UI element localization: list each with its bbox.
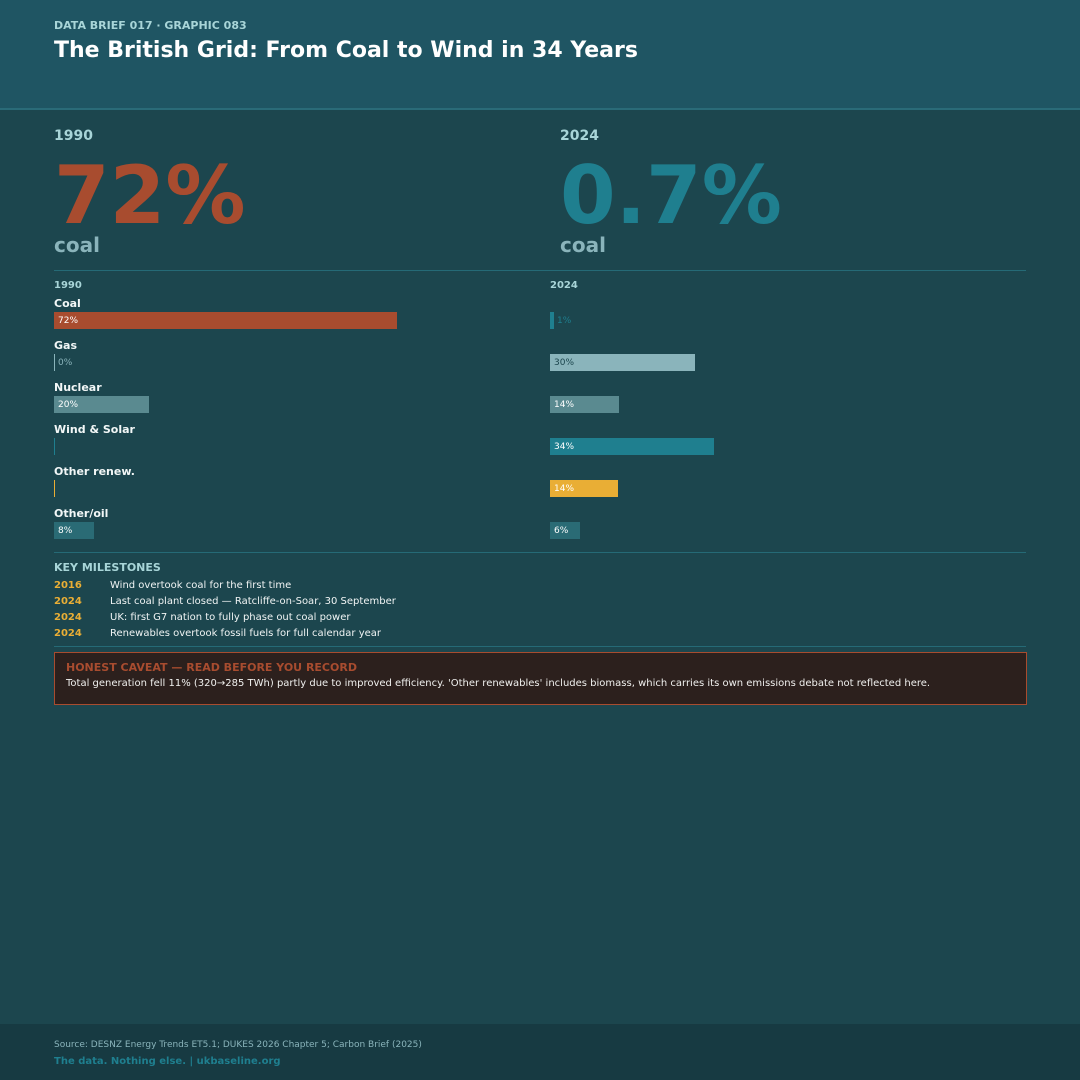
milestones heading: KEY MILESTONES — [54, 561, 161, 574]
stat value: 0.7% — [560, 149, 782, 242]
bar: other/oil 1990 — [54, 522, 94, 539]
bar: other renewables 2024: 14% — [554, 484, 574, 494]
milestones list: Renewables overtook fossil fuels for full calendar year — [110, 628, 381, 639]
bar chart: energy mix 1990 vs 2024 — [54, 280, 578, 291]
column heading 2024: 2024 — [550, 280, 578, 291]
milestone 2024 coal closure: 2024 — [54, 596, 82, 607]
bar: gas 2024 — [550, 354, 695, 371]
tagline: The data. Nothing else. | ukbaseline.org — [54, 1056, 281, 1067]
bar: nuclear 2024: 14% — [554, 400, 574, 410]
source line: Source: DESNZ Energy Trends ET5.1; DUKES 2026 Chapter 5; Carbon Brief (2025) — [54, 1040, 422, 1050]
text: 1% — [557, 316, 571, 326]
milestones list: Wind overtook coal for the first time — [110, 580, 291, 591]
stat unit: coal — [560, 233, 606, 257]
bar: coal 1990 — [54, 312, 397, 329]
milestone 2016: 2016 — [54, 580, 82, 591]
stat: 1990 coal share — [54, 128, 245, 257]
bar: other/oil 2024 — [550, 522, 580, 539]
title: The British Grid: From Coal to Wind in 34 Years — [54, 38, 638, 63]
caveat panel — [54, 652, 1027, 705]
row label: Gas: Gas — [54, 339, 77, 352]
bar: wind and solar 2024: 34% — [554, 442, 574, 452]
caveat text: Total generation fell 11% (320→285 TWh) partly due to improved efficiency. 'Other renewables' includes biomass, which carries its own emissions debate not reflected here. — [66, 678, 930, 689]
bar: wind and solar 2024 — [550, 438, 714, 455]
bar: nuclear 1990: 20% — [58, 400, 78, 410]
footer — [0, 1024, 1080, 1080]
caveat heading: HONEST CAVEAT — READ BEFORE YOU RECORD — [66, 661, 357, 674]
stat: 2024 coal share — [560, 128, 782, 257]
stat year: 1990 — [54, 128, 93, 144]
row label: Coal: Coal — [54, 297, 81, 310]
bar: wind and solar 1990 — [54, 438, 55, 455]
text: 0% — [58, 358, 72, 368]
header band — [0, 0, 1080, 110]
kicker: DATA BRIEF 017 · GRAPHIC 083 — [54, 19, 247, 32]
bar: nuclear 1990 — [54, 396, 149, 413]
column heading 1990: 1990 — [54, 280, 82, 291]
milestone 2024 G7: 2024 — [54, 612, 82, 623]
bar: other renewables 2024 — [550, 480, 618, 497]
row label: Other renew.: Other renew. — [54, 465, 135, 478]
bar: coal 2024 — [550, 312, 554, 329]
milestones list — [54, 580, 396, 639]
stat unit: coal — [54, 233, 100, 257]
milestone 2024 renewables: 2024 — [54, 628, 82, 639]
row label: Other/oil: Other/oil — [54, 507, 108, 520]
bar: nuclear 2024 — [550, 396, 619, 413]
row label: Wind & Solar: Wind & Solar — [54, 423, 135, 436]
bar: gas 2024: 30% — [554, 358, 574, 368]
bar: other/oil 2024: 6% — [554, 526, 568, 536]
bar: other renewables 1990 — [54, 480, 55, 497]
bar: other/oil 1990: 8% — [58, 526, 72, 536]
bar: gas 1990 — [54, 354, 55, 371]
bar: coal 1990: 72% — [58, 316, 78, 326]
stat year: 2024 — [560, 128, 599, 144]
row label: Nuclear: Nuclear — [54, 381, 102, 394]
milestones list: UK: first G7 nation to fully phase out coal power — [110, 612, 350, 623]
stat value: 72% — [54, 149, 245, 242]
milestones list: Last coal plant closed — Ratcliffe-on-Soar, 30 September — [110, 596, 396, 607]
